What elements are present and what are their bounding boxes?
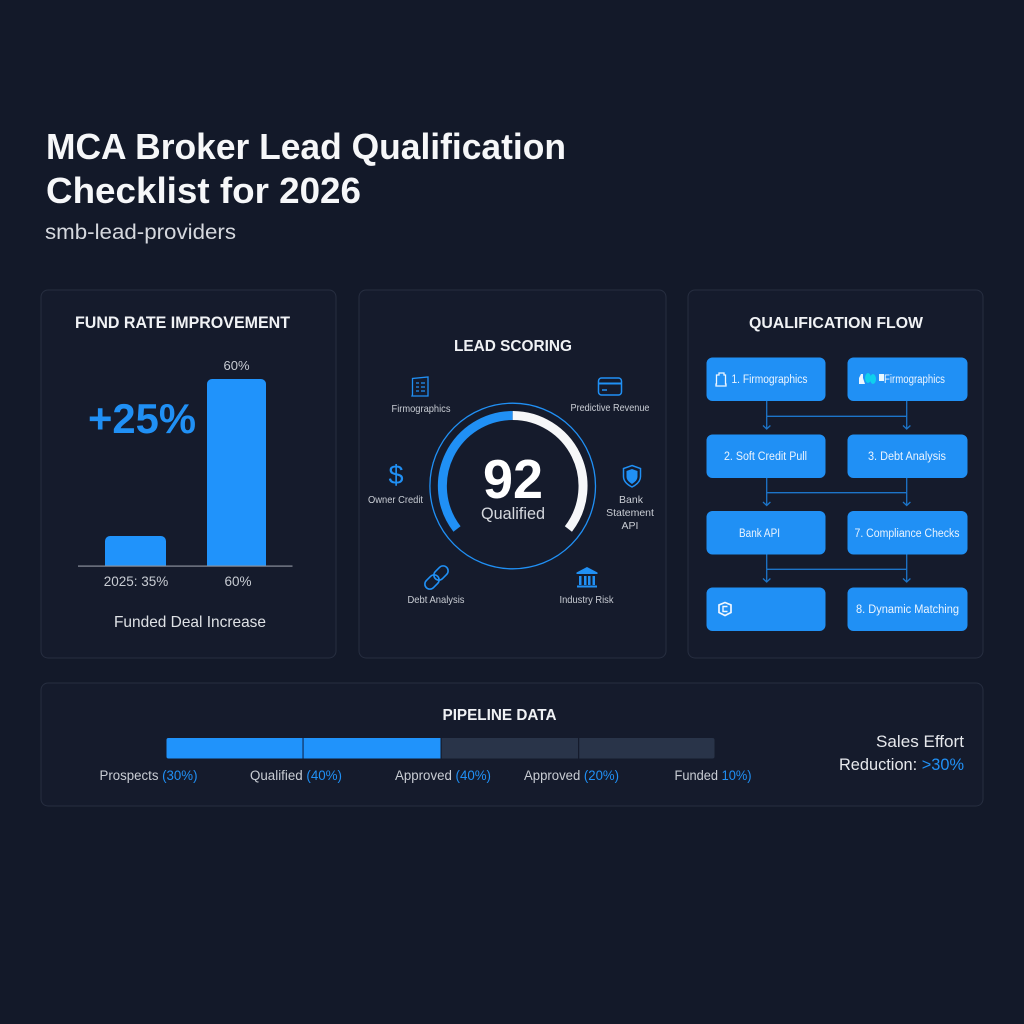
step: blank with icon <box>706 588 826 631</box>
label: bank statement api: Bank <box>619 494 644 506</box>
bar chart: 60% <box>223 358 250 373</box>
step: 2. soft credit pull <box>706 434 826 478</box>
stage labels: Qualified (40%) <box>250 768 342 783</box>
label: bank statement api: API <box>622 520 638 532</box>
step: firmographics duplicate <box>848 358 968 401</box>
segmented progress bar <box>166 738 714 758</box>
label: industry risk: Industry Risk <box>560 594 614 606</box>
title <box>46 126 566 211</box>
label: predictive revenue: Predictive Revenue <box>570 402 650 414</box>
bar chart: 2025: 35% <box>104 574 168 589</box>
step: 8. dynamic matching: 8. Dynamic Matching <box>856 604 959 616</box>
step: 8. dynamic matching <box>848 588 968 631</box>
step: 1. firmographics: 1. Firmographics <box>732 374 808 386</box>
label: bank statement api <box>606 494 654 532</box>
step: 1. firmographics <box>706 358 826 401</box>
heading: pipeline data: PIPELINE DATA <box>442 707 556 724</box>
label: owner credit: Owner Credit <box>368 494 423 506</box>
gauge <box>430 403 596 569</box>
sales effort callout: Sales Effort <box>876 732 964 751</box>
stage labels: Approved (20%) <box>524 768 619 783</box>
heading: lead scoring: LEAD SCORING <box>454 338 572 355</box>
subtitle: smb-lead-providers <box>45 221 236 244</box>
step: bank api <box>706 511 826 554</box>
panel: lead scoring <box>359 290 666 658</box>
sales effort callout: Reduction: >30% <box>839 755 964 774</box>
caption: Funded Deal Increase <box>114 614 266 631</box>
gauge: Qualified <box>481 505 545 523</box>
title: MCA Broker Lead Qualification <box>46 126 566 167</box>
panel: fund rate improvement <box>41 290 336 658</box>
panel: qualification flow <box>688 290 983 658</box>
step: firmographics duplicate: Firmographics <box>884 374 945 386</box>
icon: dollar: $ <box>388 460 404 490</box>
panel: pipeline data <box>41 683 983 806</box>
big stat: +25% <box>88 395 196 442</box>
icon: building <box>412 377 428 396</box>
stage labels: Approved (40%) <box>395 768 491 783</box>
heading: fund rate improvement: FUND RATE IMPROVEMENT <box>75 314 290 332</box>
sales effort callout <box>839 732 964 774</box>
step: bank api: Bank API <box>739 528 780 540</box>
gauge: 92 <box>483 448 543 510</box>
heading: qualification flow: QUALIFICATION FLOW <box>749 315 924 332</box>
step: 7. compliance checks: 7. Compliance Checks <box>854 528 960 540</box>
icon: credit card <box>598 378 622 395</box>
stage labels <box>100 768 752 783</box>
label: debt analysis: Debt Analysis <box>408 594 464 606</box>
bar chart <box>78 358 292 589</box>
step: 7. compliance checks <box>848 511 968 554</box>
stage labels: Prospects (30%) <box>100 768 198 783</box>
step: 2. soft credit pull: 2. Soft Credit Pull <box>724 451 807 463</box>
flow connectors <box>763 401 910 582</box>
label: firmographics: Firmographics <box>392 403 450 415</box>
icon: bank <box>576 567 598 588</box>
icon: chain link <box>423 564 450 591</box>
step: 3. debt analysis <box>848 434 968 478</box>
label: bank statement api: Statement <box>606 507 654 519</box>
bar chart: 60% <box>224 574 252 589</box>
step: 3. debt analysis: 3. Debt Analysis <box>868 451 946 463</box>
stage labels: Funded 10%) <box>674 768 752 783</box>
icon: shield <box>624 466 640 487</box>
title: Checklist for 2026 <box>46 170 361 211</box>
